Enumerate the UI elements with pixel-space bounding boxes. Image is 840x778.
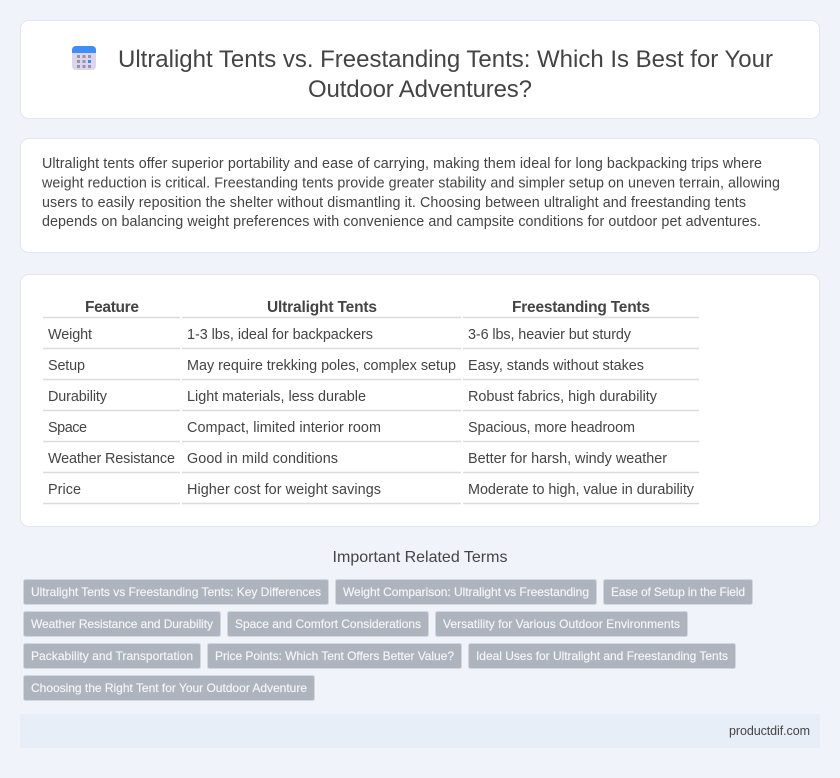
row: weight: 3-6 lbs, heavier but sturdy: [468, 327, 632, 343]
tag: [24, 676, 314, 700]
row: price: Higher cost for weight savings: [187, 482, 381, 498]
row: price: Price: [48, 482, 81, 498]
table header: Freestanding Tents: [512, 299, 650, 316]
row: space: Compact, limited interior room: [187, 420, 381, 436]
row: setup: Easy, stands without stakes: [468, 358, 644, 374]
table header: Feature: [85, 299, 139, 316]
tag: [24, 644, 200, 668]
row: price: Moderate to high, value in durability: [468, 482, 695, 498]
row: durability: Durability: [48, 389, 108, 405]
tag: Versatility for Various Outdoor Environments: [443, 617, 680, 631]
tag: Ultralight Tents vs Freestanding Tents: Key Differences: [31, 585, 321, 599]
row: weather resistance: Better for harsh, windy weather: [468, 451, 667, 467]
text block: summary: weight reduction is critical. Freestanding tents provide greater stability and simpler setup on uneven terrain, allowing: [41, 176, 780, 192]
tag: Ideal Uses for Ultralight and Freestanding Tents: [476, 649, 728, 663]
tag: [208, 644, 462, 668]
tag: [228, 612, 428, 636]
tag: Space and Comfort Considerations: [235, 617, 421, 631]
row: setup: May require trekking poles, complex setup: [187, 358, 456, 374]
tag: [336, 580, 596, 604]
text block: summary: [41, 156, 780, 230]
tag: Weight Comparison: Ultralight vs Freestanding: [343, 585, 589, 599]
icon: calendar: [72, 46, 96, 70]
tag: [24, 580, 328, 604]
title: [118, 46, 773, 103]
text block: summary: Ultralight tents offer superior portability and ease of carrying, making them ideal for long backpacking trips where: [42, 156, 762, 172]
row: durability: Light materials, less durable: [187, 389, 366, 405]
row: price: [48, 482, 695, 498]
tag: Weather Resistance and Durability: [31, 617, 213, 631]
footer bar: [20, 714, 820, 748]
row: weight: [48, 327, 632, 343]
table header: Ultralight Tents: [267, 299, 377, 316]
footer text: productdif.com: [729, 724, 810, 738]
title: Ultralight Tents vs. Freestanding Tents: Which Is Best for Your: [118, 46, 773, 73]
title: Outdoor Adventures?: [308, 76, 532, 103]
tag: [604, 580, 752, 604]
row: durability: [48, 389, 658, 405]
row: space: Spacious, more headroom: [468, 420, 635, 436]
row: durability: Robust fabrics, high durability: [468, 389, 658, 405]
row: weight: Weight: [48, 327, 92, 343]
header panel: [20, 20, 820, 118]
panel: comparison table: [20, 274, 820, 526]
tag: [436, 612, 688, 636]
tag: [24, 612, 220, 636]
table header: [85, 299, 650, 316]
row: weight: 1-3 lbs, ideal for backpackers: [187, 327, 373, 343]
row: space: Space: [48, 420, 87, 436]
text block: summary: users to easily reposition the shelter without dismantling it. Choosing between ultralight and freestanding tents: [42, 195, 746, 211]
row: weather resistance: Weather Resistance: [48, 451, 175, 467]
heading: related terms: Important Related Terms: [333, 549, 507, 566]
tag: Ease of Setup in the Field: [611, 585, 745, 599]
row: weather resistance: [48, 451, 667, 467]
row: setup: [48, 358, 644, 374]
row: space: [48, 420, 635, 436]
row: weather resistance: Good in mild conditions: [187, 451, 338, 467]
related term tags: [24, 580, 752, 700]
tag: Choosing the Right Tent for Your Outdoor Adventure: [31, 681, 307, 695]
row: setup: Setup: [48, 358, 85, 374]
tag: Packability and Transportation: [31, 649, 193, 663]
tag: [468, 644, 736, 668]
text block: summary: depends on balancing weight preferences with convenience and campsite conditions for outdoor pet adventures.: [42, 214, 761, 230]
tag: Price Points: Which Tent Offers Better Value?: [215, 649, 454, 663]
panel: summary paragraph: [20, 138, 820, 252]
